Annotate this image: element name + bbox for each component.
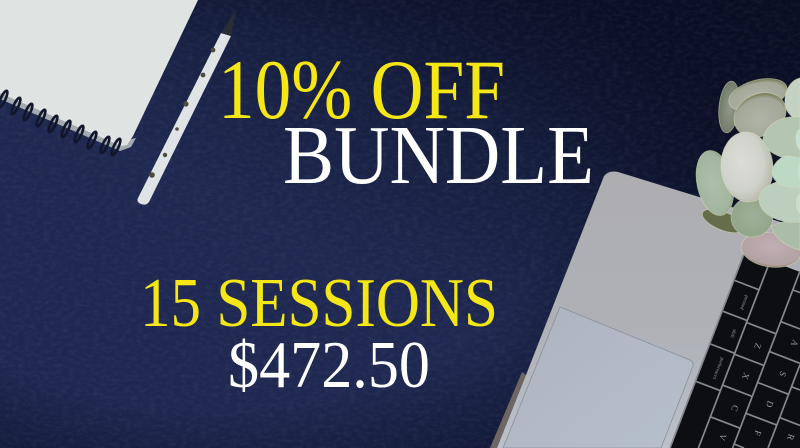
key labels: V: [717, 432, 729, 442]
key labels: S: [777, 370, 788, 378]
keyboard: [670, 251, 800, 448]
key labels: shift: [728, 328, 736, 339]
text: 15 SESSIONS: 15 SESSIONS: [140, 265, 498, 342]
trackpad: [503, 307, 693, 448]
key labels: R: [785, 432, 797, 442]
key labels: D: [764, 399, 776, 409]
laptop body: [497, 172, 800, 448]
text: price: $472.50: [228, 328, 430, 402]
key labels: Z: [752, 342, 763, 350]
key labels: [711, 294, 800, 442]
laptop hinge strip: [490, 372, 526, 448]
icon: spiral notebook: [0, 0, 198, 156]
key labels: X: [740, 371, 752, 381]
key labels: F: [752, 429, 763, 437]
key labels: pressed: [738, 294, 748, 311]
heading: BUNDLE: BUNDLE: [283, 109, 594, 202]
laptop: [490, 172, 800, 448]
notebook spiral rings: [0, 90, 122, 156]
icon: succulent plant: [691, 73, 800, 271]
heading: 10% OFF: 10% OFF: [218, 43, 505, 137]
key labels: C: [729, 403, 741, 413]
key labels: preferences: [711, 357, 724, 380]
icon: white pencil: [137, 10, 236, 205]
